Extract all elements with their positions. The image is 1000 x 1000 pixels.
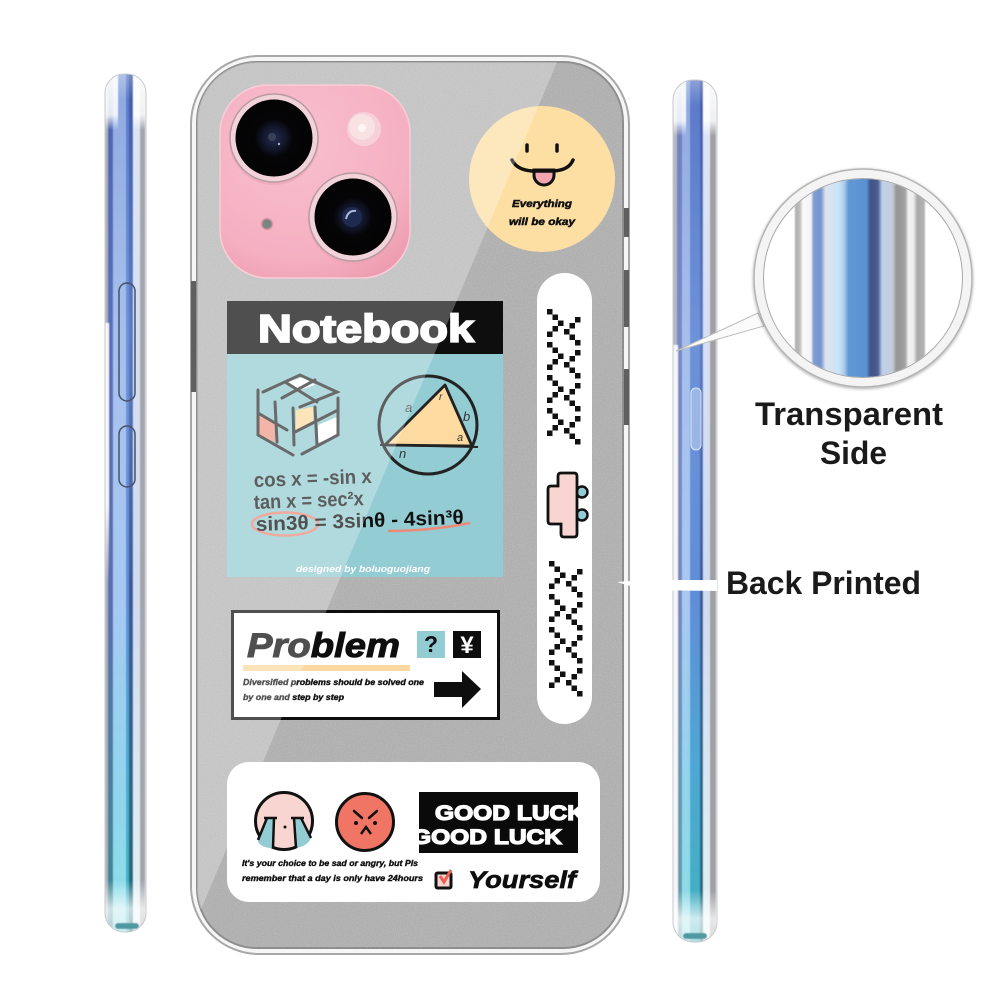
callout: magnifier circle (754, 169, 972, 387)
left volume button up (119, 283, 135, 401)
label: transparent side: Transparent (755, 396, 943, 432)
callout: magnifier pointer (676, 313, 764, 351)
smiley eyes (527, 145, 557, 151)
right side button shadow middle (624, 270, 629, 327)
sticker: problem (232, 612, 498, 718)
main lens (229, 94, 319, 185)
yen icon: ¥ (460, 632, 474, 659)
microphone (262, 218, 272, 230)
formula line three: sin3θ = 3sinθ - 4sin³θ (255, 507, 464, 536)
circle and triangle diagram (379, 376, 478, 474)
label: back printed: Back Printed (726, 565, 921, 601)
good luck panel (227, 762, 600, 902)
good luck text: GOOD LUCK (412, 826, 562, 849)
angry face (336, 794, 394, 850)
good luck black block (419, 792, 578, 853)
label: transparent side: Side (820, 435, 887, 471)
upper pixel pattern (547, 309, 580, 444)
left phone outline (105, 74, 146, 932)
problem frame (232, 612, 498, 718)
question mark icon (417, 631, 445, 658)
right phone outline (673, 80, 717, 942)
camera island (220, 85, 410, 278)
good luck text: GOOD LUCK (435, 802, 585, 825)
smiley caption line two: will be okay (509, 217, 576, 228)
smiley mouth (512, 160, 573, 171)
glossy diagonal reflection (184, 55, 560, 950)
left side button shadow (191, 281, 196, 392)
formula underline and circle (252, 512, 470, 536)
crying face (256, 792, 312, 850)
surface grain (197, 62, 623, 948)
designer credit: designed by boluoguojiang (296, 564, 430, 575)
sticker: pixel pattern strip with car (537, 273, 592, 724)
lower pixel pattern (549, 561, 582, 696)
problem heading: Problem (247, 627, 400, 665)
right side view of the phone case (672, 80, 718, 942)
second lens (308, 173, 398, 264)
formula line two: tan x = sec²x (253, 488, 364, 514)
left volume button down (119, 426, 135, 487)
arrow (434, 671, 481, 708)
checkbox icon (436, 870, 451, 888)
circle and triangle diagram: r (439, 392, 443, 403)
case rim (191, 56, 629, 954)
camera module (220, 85, 410, 278)
formula line one: cos x = -sin x (253, 466, 372, 492)
strip background (537, 273, 592, 724)
sticker: smiley everything will be okay (469, 106, 615, 252)
callout: back printed pointer (617, 580, 717, 591)
notebook teal panel (227, 301, 503, 577)
smiley tongue (534, 170, 554, 185)
yen icon (453, 631, 481, 659)
sticker: notebook (227, 301, 503, 577)
notebook header bar (227, 301, 503, 354)
car icon (548, 473, 588, 537)
good luck text (419, 804, 578, 845)
notebook title: Notebook (258, 308, 474, 351)
cube drawing (258, 375, 338, 455)
flash (347, 112, 381, 146)
right power button (691, 388, 701, 450)
phone back case (191, 56, 629, 954)
circle and triangle diagram: a (457, 432, 463, 444)
message line one: It's your choice to be sad or angry, but Pls (242, 858, 418, 868)
right side button shadow lower (624, 369, 629, 425)
problem description line one: Diversified problems should be solved one (243, 677, 424, 687)
right side button shadow top (624, 208, 629, 237)
circle and triangle diagram: n (399, 446, 406, 461)
problem description line two: by one and step by step (243, 692, 344, 702)
yourself: Yourself (468, 867, 578, 894)
label: transparent side (755, 396, 943, 471)
smiley caption line one: Everything (512, 199, 572, 210)
diagram letters: a (405, 400, 412, 415)
circle and triangle diagram: b (463, 409, 470, 424)
message line two: remember that a day is only have 24hours (242, 873, 423, 883)
case back surface (197, 62, 623, 948)
sticker: good luck yourself (227, 762, 600, 902)
magnified stripes (795, 170, 925, 386)
question mark icon: ? (424, 631, 438, 657)
yellow underline (243, 665, 410, 671)
left side view of the phone case (104, 74, 146, 932)
